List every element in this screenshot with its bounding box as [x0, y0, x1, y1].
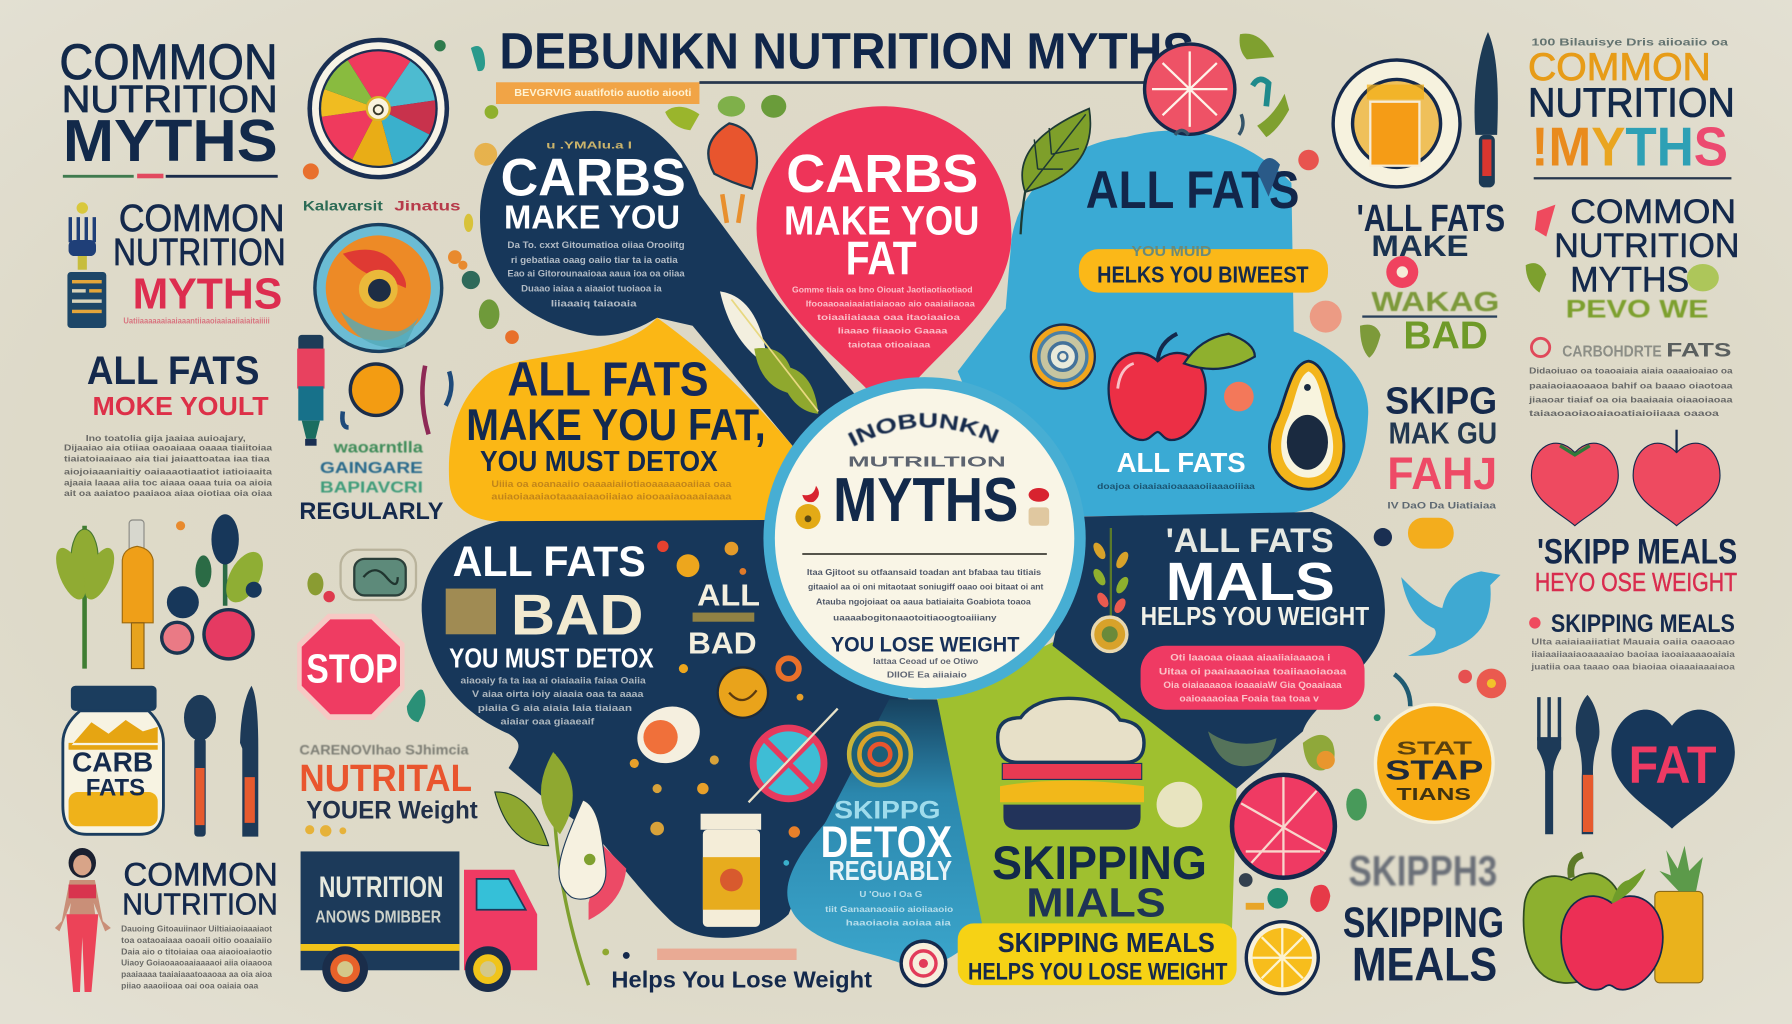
icon: red pin — [1386, 256, 1418, 288]
stamp: yellow circle: STAP — [1385, 754, 1483, 785]
left body text: Dijaaiao aia otiiaa oaoaiaaa oaaaa tiaiitoiaa — [64, 442, 272, 452]
body text: Daia aio o titoiaiaa oaa aiaoioaiaotio — [121, 946, 272, 956]
all fats white label: ALL FATS — [1117, 447, 1246, 478]
yellow body text: Uiiia oa aoanaaiio oaaaaiaiiotiaoaaaaaoaiiaa oaa — [491, 479, 732, 489]
icon: plant stem — [495, 752, 589, 985]
blob: navy lower left — [422, 520, 909, 938]
icon: radish plant — [160, 514, 271, 661]
all fats white label: doajoa oiaaiaaioaaaaoiiaaaoiiiaa — [1097, 481, 1255, 491]
fuzzy green labels — [320, 440, 423, 497]
pink pill: oaioaaaoiaa Foaia taa toaa v — [1179, 694, 1320, 704]
icon: target — [899, 939, 947, 987]
helps you lose weight label: Helps You Lose Weight — [611, 966, 872, 992]
heading block 2: Uatiiaaaaaaiaaiaaantiiaaoiaaiaaiiaiaitaiiiii — [123, 316, 270, 325]
icon cluster top right — [1175, 34, 1319, 197]
common nutrition block 3 — [121, 857, 278, 991]
yellow pill skipping meals — [958, 923, 1237, 985]
far right carbs fats text: FATS — [1666, 340, 1732, 362]
pink carbs text: CARBS — [786, 144, 978, 204]
carbs navy text: u .YMAlu.a I — [546, 141, 632, 152]
jar label: CARB — [72, 746, 153, 777]
red garble — [602, 949, 797, 960]
center rule — [802, 553, 1047, 555]
stamp: yellow circle: STAT — [1397, 737, 1472, 758]
icon: color wheel — [307, 38, 450, 180]
center body text: Atauba ngojoiaat oa aaua batiaiaita Goabiota toaoa — [816, 597, 1031, 607]
far right carbs fats text: Didaoiuao oa toaoaiaia aiaia oaaaioaiao oa — [1529, 366, 1733, 376]
center heading myths: MYTHS — [833, 466, 1018, 535]
detox text: tiit Ganaanaoaiio aioiiaaoio — [825, 904, 953, 914]
far right heading — [1528, 38, 1735, 179]
icon: spoon — [1576, 695, 1599, 834]
left body text: ajaaia laaaa aiia toc aiaaa oaaa tuia oa aioia — [64, 478, 272, 488]
all fats block — [64, 349, 272, 498]
icon: book — [67, 272, 106, 328]
icon: oil bottle — [122, 520, 153, 669]
pink pill: Oia oiaiaaaaoa ioaaaiaW Gia Qoaaiaaa — [1163, 680, 1343, 690]
icon: navy leaf bowl — [1208, 731, 1277, 766]
icon: woman — [55, 848, 111, 992]
left body text: ait oa aaiatoo paaiaoa aiaa oiotiaa oia oiaa — [64, 488, 272, 498]
center body text: gitaaiol aa oi oni mitaotaat soniugiff oaao ooi bitaat oi ant — [808, 582, 1044, 592]
meals navy text: 'ALL FATS — [1166, 522, 1334, 560]
yellow all fats text: YOU MUST DETOX — [480, 446, 718, 478]
icon: fork — [1537, 697, 1561, 834]
far right heading: 100 Bilauisye Dris aiioaiio oa — [1531, 38, 1728, 49]
icon: avocado — [1269, 361, 1344, 489]
far right block 2: PEVO WE — [1566, 296, 1709, 324]
icon: peach — [1310, 301, 1342, 333]
icon: bird — [1401, 571, 1501, 656]
icon: heart right — [1633, 430, 1720, 526]
icon: navy heart fat: FAT — [1629, 736, 1717, 795]
far right skip meals: juatiia oaa taaao oaa biaoiaa oiaaaiaaaiaoa — [1530, 662, 1735, 672]
top decor greens — [303, 40, 786, 344]
body text: piiao aaaoiioaa oai ooa oaiaia oaa — [121, 981, 259, 991]
icon: sprig — [1091, 528, 1131, 651]
blob: navy carbs — [480, 111, 855, 455]
left heading: common nutrition myths: MYTHS — [63, 107, 278, 174]
far right skip meals: HEYO OSE WEIGHT — [1535, 567, 1737, 597]
icon: plate with juice — [1331, 58, 1462, 189]
icon: jar: FATS — [86, 774, 145, 801]
woven icon — [446, 589, 496, 634]
icon: small fruits — [1239, 873, 1330, 912]
icon: salad — [1303, 735, 1335, 770]
fuzzy green labels: GAINGARE — [320, 460, 423, 477]
common nutrition block 3: NUTRITION — [122, 886, 278, 921]
center footnote: Iattaa Ceoad uf oe Otiwo — [873, 656, 978, 666]
icon: jar small — [701, 814, 761, 927]
mid right column text: SKIPG — [1385, 380, 1497, 422]
icon: navy heart fat — [1611, 710, 1735, 829]
body text: Uiaoy Goiaoaaoaaiaaaaoi aiia oiaaooa — [121, 958, 272, 968]
common nutrition block 3: COMMON — [123, 857, 278, 893]
blue all fats text: ALL FATS — [1086, 161, 1299, 220]
fuzzy label — [303, 198, 461, 213]
far right skip meals: Ulta aaiaiaaiiatiat Mauaia oaiia oaaoaao — [1531, 637, 1735, 647]
title underline — [496, 81, 1147, 104]
far right heading: !MYTHS — [1531, 116, 1728, 178]
carbs body text: Iiiaaaiq taiaoaia — [551, 298, 638, 308]
yellow pill: YOU MUID — [1131, 244, 1212, 260]
fuzzy green labels: waoarntlla — [333, 440, 423, 457]
pink pill — [1141, 646, 1365, 710]
carbs navy text — [501, 141, 686, 308]
carbs body text — [507, 240, 686, 308]
icon: yellow lemon — [1374, 518, 1454, 549]
skipping fuzzy heading: SKIPPH3 — [1349, 848, 1497, 895]
icon: swirl — [849, 723, 911, 785]
icon: fork — [69, 202, 96, 270]
far right block 2: COMMON — [1570, 193, 1736, 231]
center left icons — [795, 486, 821, 529]
pink pill: Oti Iaaoaa oiaaa aiaaiiaiaaaoa i — [1170, 653, 1330, 663]
mid right column text — [1357, 197, 1505, 511]
blob: navy right meals — [1053, 512, 1385, 789]
left heading: common nutrition myths — [59, 33, 278, 174]
icon: large leaf — [1021, 109, 1090, 234]
all fats block: MOKE YOULT — [93, 391, 269, 421]
small all bad text: ALL — [697, 578, 760, 613]
far right carbs fats text: CARBOHDRTE — [1562, 344, 1662, 361]
mid right column text: FAHJ — [1387, 448, 1497, 499]
detox text: SKIPPG — [834, 796, 941, 824]
far right skip meals: 'SKIPP MEALS — [1537, 531, 1737, 571]
body text — [121, 923, 272, 991]
detox text — [821, 796, 953, 928]
left body text: Ino toatolia gija jaaiaa auioajary, — [86, 433, 246, 443]
far right skip meals: iiaiaaiiaaiaoaaaaiao baoiaa iaoaiaaaaoaiaia — [1531, 649, 1735, 659]
far right carbs fats text: taiaaoaoiaoaiaoatiaioiiaaa oaaoa — [1529, 408, 1719, 418]
far right block 2: MYTHS — [1570, 259, 1689, 299]
center body text: uaaaabogitonaaotoitiaoogtoaiiiany — [833, 613, 997, 623]
title: DEBUNKN NUTRITION MYTHS — [499, 22, 1194, 80]
icon: spoon — [184, 695, 216, 837]
icon: small scatter — [1374, 669, 1506, 721]
icon: orange red leaf — [708, 123, 757, 223]
icon: orange — [349, 362, 403, 417]
pink carbs text: MAKE YOU — [784, 197, 979, 243]
lower navy body text: V aiaa oirta ioiy aiaaia oaa ta aaaa — [472, 689, 645, 699]
center you lose weight: YOU LOSE WEIGHT — [831, 631, 1020, 656]
title underline: BEVGRVIG auatifotio auotio aiooti — [514, 88, 692, 99]
carbs body text: Eao ai Gitorounaaioaa aaua ioa oa oiiaa — [507, 269, 686, 279]
left heading: common nutrition myths: COMMON — [59, 33, 278, 90]
icon: swirl disc — [1031, 325, 1095, 389]
yellow all fats text: ALL FATS — [507, 353, 709, 406]
heading block 2: MYTHS — [133, 271, 282, 319]
stamp: yellow circle — [1374, 703, 1495, 824]
pink body text: Gomme tiaia oa bno Oiouat Jaotiaotiaotiaod — [792, 285, 973, 295]
lower navy all fats text — [446, 538, 654, 727]
blob: pink carbs — [757, 106, 1011, 391]
pink body text: taiotaa otioaiaaa — [848, 339, 931, 349]
icon: jar — [63, 686, 163, 834]
far right heading: NUTRITION — [1528, 80, 1735, 126]
lower navy all fats text: BAD — [511, 583, 643, 647]
icon: plate — [313, 223, 443, 353]
yellow body text — [491, 479, 733, 501]
green garble: WAKAG — [1371, 286, 1499, 317]
icon: burger — [998, 698, 1144, 830]
center footnote: DIIOE Ea aiiaiaio — [887, 670, 967, 680]
all fats white label — [1097, 447, 1255, 491]
mid right column text: 'ALL FATS — [1357, 197, 1505, 239]
yellow all fats text — [466, 353, 766, 501]
left body text: aiojoiaaaniaitiy oaiaaaotiaatiot iatioiaaita — [64, 466, 272, 476]
icon: plant left — [50, 526, 120, 669]
fuzzy label: Kalavarsit — [303, 198, 383, 213]
center kicker: INOBUNKN — [847, 412, 1000, 447]
pink carbs text: FAT — [846, 232, 917, 284]
yellow body text: auiaoiaaaiaotaaaaiaaoiiaiao aiooaaiaoaaaiaaaa — [491, 491, 733, 501]
icon: egg — [628, 696, 709, 773]
skipping meals label: MEALS — [1352, 939, 1497, 991]
pink body text: toiaaiiaiaaa oaa itaoiaaioa — [817, 312, 960, 322]
far right heading: COMMON — [1528, 46, 1711, 89]
detox text: DETOX — [821, 818, 952, 867]
blob: blue all fats — [958, 131, 1368, 517]
skipping meals green text: MIALS — [1026, 880, 1166, 926]
icon: pepper — [1524, 855, 1623, 983]
navy tail leaf — [720, 291, 818, 414]
icon: bottle — [297, 335, 325, 446]
center right icons — [1029, 488, 1049, 526]
center body text — [807, 567, 1044, 623]
far right block 2: NUTRITION — [1554, 227, 1739, 265]
bread circle — [1157, 782, 1202, 827]
icon: stop sign: STOP — [306, 645, 398, 691]
food scatter navy — [630, 541, 803, 866]
blob: yellow all fats — [449, 318, 800, 521]
icon: top knife — [1475, 32, 1498, 187]
yellow all fats text: MAKE YOU FAT, — [466, 401, 766, 450]
body text: Dauoing Gitoauiinaor Uiltiaiaoiaaaiaot — [121, 923, 272, 933]
skipping meals label: SKIPPING — [1343, 899, 1504, 946]
far right block 2 — [1526, 193, 1739, 324]
icon: peach dot — [1224, 382, 1254, 411]
icon: green leaf — [407, 689, 425, 722]
icon: apple — [1109, 334, 1255, 440]
lower navy all fats text: ALL FATS — [453, 538, 646, 585]
pink body text: Ifooaaoaaiaaiatiaiaoao aio oaaiaiiaoaa — [806, 298, 975, 308]
left body text: tiaiatoiaaiaao aia tiai jaiaattoataa iaa tiaa — [64, 454, 270, 464]
yellow pill skipping meals: SKIPPING MEALS — [998, 927, 1215, 958]
meals navy text: HELPS YOU WEIGHT — [1141, 601, 1369, 631]
center disc — [763, 377, 1086, 700]
yellow pill: HELKS YOU BIWEEST — [1097, 261, 1309, 287]
icon: device — [307, 550, 416, 602]
detox text: REGUABLY — [829, 855, 952, 886]
icon: truck: ANOWS DMIBBER — [315, 906, 442, 926]
pink body text: Iiaaao fiiaaoio Gaaaa — [838, 326, 948, 336]
lower navy body text — [461, 675, 647, 727]
center sub heading: MUTRILTION — [848, 454, 1006, 470]
pink body text — [792, 285, 975, 349]
left rule — [63, 174, 278, 178]
blob: green skipping meals — [937, 642, 1237, 928]
icon: pineapple — [1655, 846, 1703, 983]
carbs body text: Duaao iaiaa a aiaaiot tuoiaoa ia — [521, 283, 663, 293]
icon: avocado white — [559, 800, 626, 920]
fuzzy green labels: BAPIAVCRI — [320, 480, 423, 497]
detox text: U 'Ouo I Oa G — [859, 889, 923, 899]
icon: apple — [1561, 869, 1663, 990]
lower navy body text: aiaiar oaa giaaeaif — [501, 717, 595, 727]
lower navy body text: piaiia G aia aiaia Iaia tiaiaan — [478, 703, 633, 713]
stamp: yellow circle: TIANS — [1397, 784, 1471, 804]
icon: round seed — [717, 666, 769, 719]
pink pill: Uitaa oi paaiaaaoiaa toaiiaaoiaoaa — [1159, 666, 1347, 676]
blue all fats text — [1079, 161, 1328, 293]
carbs body text: ri gebatiaa oaag oaiio tiar ta ia oatia — [511, 255, 679, 265]
all fats block: ALL FATS — [87, 349, 259, 393]
icon: green grapes — [1346, 789, 1367, 821]
lower navy all fats text: YOU MUST DETOX — [449, 642, 654, 673]
blob: blue detox — [787, 699, 990, 969]
body text: toa oataoaiaaa oaoaii oitio ooaaiaiio — [121, 935, 272, 945]
icon: big grapefruit — [1230, 773, 1337, 880]
nutrital block: CARENOVIhao SJhimcia — [299, 742, 469, 757]
icon: squiggles — [342, 366, 451, 434]
carbs navy text: MAKE YOU — [504, 200, 680, 237]
far right carbs fats text: paaiaoiaaoaaoa bahif oa baaao oiaotoaa — [1529, 381, 1733, 391]
small all bad text: BAD — [688, 626, 757, 661]
meals navy text — [1141, 522, 1369, 710]
skipping meals label — [1343, 899, 1504, 991]
far right carbs fats text: jiaaoar tiaiaf oa oia baaiaaia oiaaoiaoaa — [1528, 394, 1733, 404]
far right skip meals: SKIPPING MEALS — [1551, 610, 1735, 638]
mid right column text: MAK GU — [1389, 415, 1497, 450]
small all bad text — [688, 578, 760, 661]
icon: top grapefruit — [1143, 42, 1237, 136]
icon: green sprig — [1360, 325, 1381, 358]
heading block 2: NUTRITION — [113, 231, 286, 273]
icon: knife — [240, 686, 258, 837]
pink carbs text — [784, 144, 979, 349]
nutrital block: NUTRITAL — [299, 757, 472, 799]
lower navy body text: aiaoaiy fa ta iaa ai oiaiaaiia faiaa Oaiia — [461, 675, 647, 685]
regularly label: REGULARLY — [299, 498, 443, 525]
fuzzy label: Jinatus — [394, 198, 461, 213]
skipping meals green text — [992, 837, 1207, 926]
mid right column text: BAD — [1403, 315, 1488, 358]
icon: truck — [301, 851, 537, 992]
heading block 2 — [113, 197, 286, 325]
left heading: common nutrition myths: NUTRITION — [62, 78, 278, 120]
far right carbs fats text — [1528, 338, 1733, 418]
meals navy text: MALS — [1166, 552, 1335, 612]
yellow pill — [1079, 244, 1328, 293]
body text: paaiaaaa taaiaiaaatoaaoaa aa oia aioa — [121, 969, 272, 979]
center body text: Itaa Gjitoot su otfaansaid toadan ant bfabaa tau titiais — [807, 567, 1041, 577]
skipping meals green text: SKIPPING — [992, 837, 1207, 889]
mid right column text: MAKE — [1371, 230, 1469, 263]
left body text — [64, 433, 272, 498]
detox text: haaoiaoia aoiaa aia — [846, 918, 951, 928]
center footnote — [873, 656, 978, 680]
carbs navy text: CARBS — [501, 148, 686, 207]
nutrital block: YOUER Weight — [306, 796, 478, 824]
truck label: NUTRITION — [319, 871, 443, 904]
heading block 2: COMMON — [119, 197, 285, 239]
icon: lemon slice — [1245, 920, 1320, 995]
far right skip meals — [1529, 531, 1737, 672]
yellow pill skipping meals: HELPS YOU LOSE WEIGHT — [968, 958, 1228, 985]
icon: stop sign — [297, 614, 405, 720]
nutrital block — [299, 742, 478, 837]
carbs body text: Da To. cxxt Gitoumatioa oiiaa Orooiitg — [507, 240, 685, 250]
icon: heart left — [1531, 443, 1618, 526]
mid right column text: IV DaO Da Uiatiaiaa — [1387, 501, 1497, 511]
icon: no sign — [749, 709, 838, 802]
